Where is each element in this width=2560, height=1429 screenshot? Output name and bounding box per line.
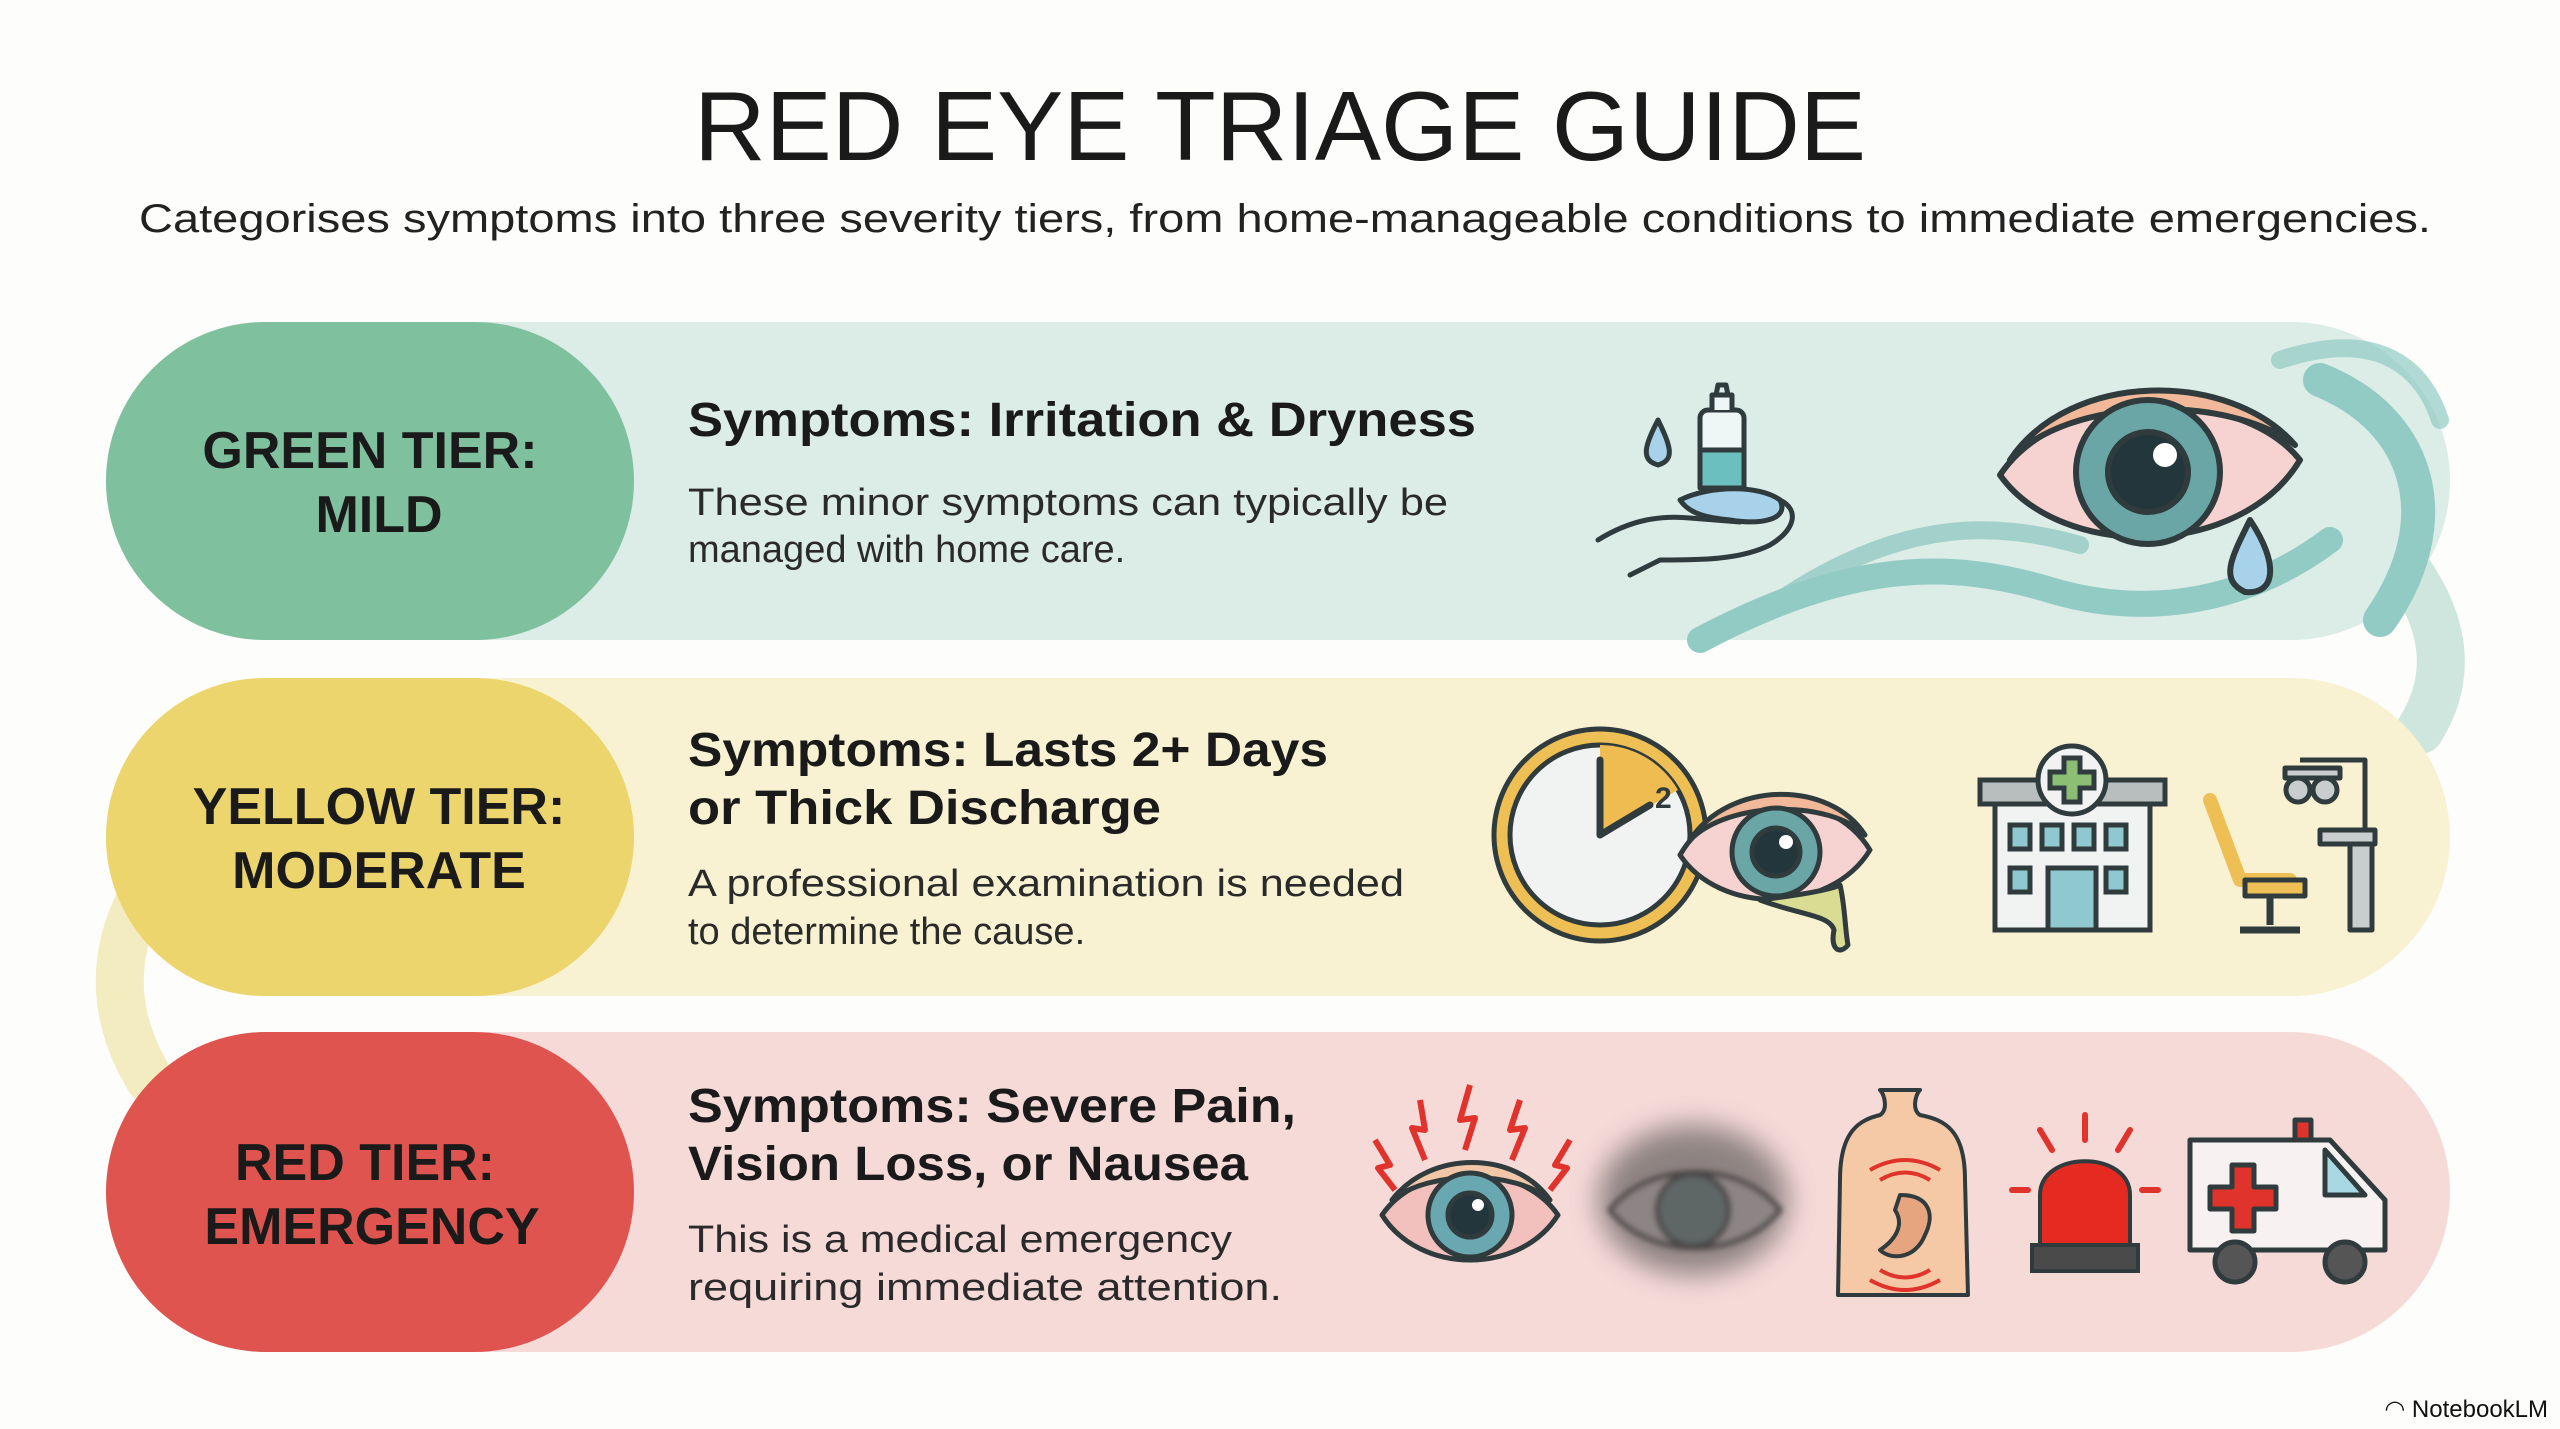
- text: green description: managed with home care.: [688, 529, 1125, 571]
- icon: exam chair: [2210, 760, 2375, 930]
- text: yellow description: to determine the cause.: [688, 911, 1085, 953]
- icon: clock: [1494, 729, 1706, 941]
- pill: green tier label: [106, 322, 634, 640]
- icon: ambulance: [2190, 1120, 2385, 1282]
- heading: red symptoms: Vision Loss, or Nausea: [688, 1138, 1248, 1191]
- text: yellow description: A professional examination is needed: [688, 863, 1404, 905]
- text: red description: [688, 1219, 1282, 1309]
- heading: red symptoms: Symptoms: Severe Pain,: [688, 1080, 1296, 1133]
- pill: red tier label: RED TIER:: [235, 1134, 495, 1192]
- text: yellow description: [688, 863, 1404, 953]
- pill: green tier label: GREEN TIER:: [202, 422, 538, 480]
- pill: red tier label: [106, 1032, 634, 1352]
- heading: yellow symptoms: or Thick Discharge: [688, 782, 1161, 835]
- footer: NotebookLM credit: ◠ NotebookLM: [2384, 1396, 2548, 1423]
- text: red description: This is a medical emergency: [688, 1219, 1232, 1261]
- pill: yellow tier label: MODERATE: [232, 842, 526, 900]
- icon: torso with stomach: [1838, 1090, 1968, 1295]
- panel: green tier: [106, 322, 2450, 640]
- connector: green to yellow (right): [2400, 560, 2441, 730]
- icon: blurred vision eye: [1598, 1125, 1788, 1275]
- heading: yellow symptoms: Symptoms: Lasts 2+ Days: [688, 724, 1328, 777]
- text: red description: requiring immediate attention.: [688, 1267, 1282, 1309]
- pill: yellow tier label: [106, 678, 634, 996]
- connector: yellow to red (left): [120, 900, 150, 1080]
- heading: red symptoms: [688, 1080, 1296, 1191]
- icon: painful eye with lightning: [1375, 1085, 1570, 1260]
- text: green description: These minor symptoms can typically be: [688, 482, 1448, 524]
- title: RED EYE TRIAGE GUIDE: [694, 71, 1866, 181]
- pill: red tier label: EMERGENCY: [204, 1198, 540, 1256]
- icon: eye with discharge: [1680, 794, 1870, 950]
- panel: yellow tier: [106, 678, 2450, 996]
- icon: clock: 2: [1655, 782, 1672, 815]
- icon: siren: [2012, 1115, 2158, 1271]
- pill: green tier label: MILD: [315, 486, 443, 544]
- subtitle: Categorises symptoms into three severity tiers, from home-manageable conditions to immediate emergencies.: [139, 197, 2431, 241]
- heading: green symptoms: Symptoms: Irritation & Dryness: [688, 394, 1476, 447]
- waves decoration: [1700, 348, 2440, 640]
- heading: yellow symptoms: [688, 724, 1328, 835]
- icon: red irritated eye with tear: [2000, 390, 2300, 592]
- icon: hand with eye drops: [1598, 385, 1792, 575]
- icon: hospital: [1980, 746, 2165, 930]
- panel: red tier: [106, 1032, 2450, 1352]
- pill: yellow tier label: YELLOW TIER:: [193, 778, 565, 836]
- text: green description: [688, 482, 1448, 571]
